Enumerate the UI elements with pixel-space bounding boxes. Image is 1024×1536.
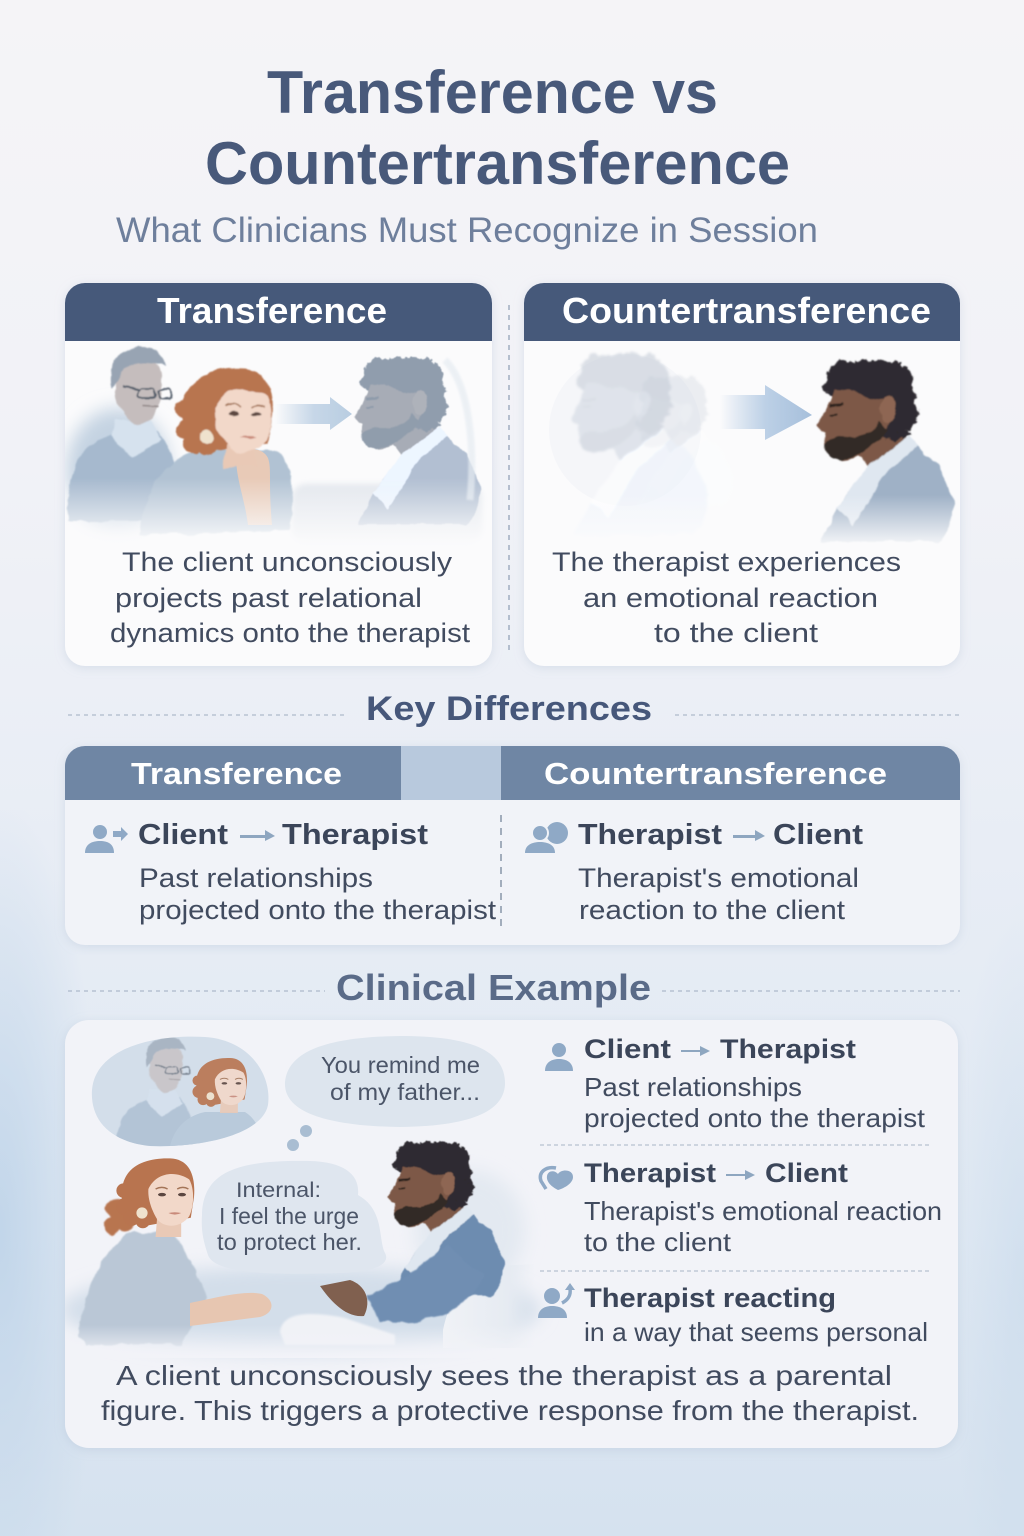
therapist chair arm (280, 1314, 395, 1345)
item: client to therapist: Client (584, 1034, 671, 1064)
transference description: The client unconsciously (122, 547, 453, 577)
table header left (65, 746, 401, 800)
case summary: A client unconsciously sees the therapist as a parental (116, 1360, 892, 1391)
item: client to therapist (584, 1034, 926, 1133)
item: therapist to client: Therapist's emotional reaction (584, 1196, 942, 1226)
title (205, 59, 790, 197)
speech bubble: internal thought: Internal: (236, 1179, 321, 1202)
left column heading: Transference (131, 756, 342, 791)
left column description: projected onto the therapist (139, 895, 497, 925)
direction label: therapist to client (578, 819, 863, 851)
transference description (110, 547, 471, 648)
icon: therapist to client (525, 822, 568, 853)
item: therapist to client: to the client (584, 1227, 732, 1257)
item: therapist reacting: Therapist reacting (584, 1283, 836, 1313)
thought bubble with memory of father (92, 1036, 268, 1146)
speech bubble: you remind me: You remind me (321, 1052, 480, 1078)
right column description: reaction to the client (579, 895, 846, 925)
title: Transference vs (267, 59, 718, 126)
item: client to therapist: Therapist (720, 1034, 856, 1064)
countertransference description: The therapist experiences (552, 547, 901, 577)
right column description: Therapist's emotional (578, 863, 859, 893)
item: client to therapist: Past relationships (584, 1072, 802, 1102)
thought dots (287, 1125, 312, 1151)
direction label: client to therapist (138, 819, 428, 851)
transference description: projects past relational (115, 583, 422, 613)
therapist figure (388, 1142, 504, 1296)
speech bubble: you remind me: of my father... (330, 1079, 480, 1105)
direction label: client to therapist: Therapist (282, 819, 428, 851)
speech bubble: internal thought (202, 1161, 386, 1274)
left column description: Past relationships (139, 863, 373, 893)
transference heading: Transference (157, 290, 387, 331)
countertransference header bar (524, 283, 960, 341)
illustration: therapist with ghosted reflection (570, 351, 956, 543)
case summary (101, 1360, 919, 1426)
arrow: projection (275, 397, 352, 430)
therapist chair back (443, 1289, 521, 1342)
item: therapist reacting: in a way that seems personal (584, 1317, 928, 1347)
item: therapist to client (584, 1158, 942, 1257)
arrow: reaction (720, 385, 812, 440)
item: therapist to client: Therapist (584, 1158, 716, 1188)
heading: key differences: Key Differences (366, 690, 652, 728)
speech bubble: internal thought: to protect her. (217, 1229, 362, 1255)
panel: transference (65, 283, 492, 666)
right column description (578, 863, 859, 925)
item: therapist to client: Client (765, 1158, 848, 1188)
countertransference description: an emotional reaction (583, 583, 878, 613)
item: client to therapist: projected onto the therapist (584, 1103, 926, 1133)
panel: clinical example (60, 1020, 958, 1448)
panel: key differences table (65, 746, 960, 945)
countertransference description: to the client (654, 618, 819, 648)
table header right (501, 746, 960, 800)
direction label: therapist to client: Therapist (578, 819, 722, 851)
speech bubble: you remind me (285, 1036, 505, 1127)
transference description: dynamics onto the therapist (110, 618, 471, 648)
icon: client (545, 1043, 573, 1071)
icon: therapist reacting (538, 1283, 575, 1318)
direction label: therapist to client: Client (773, 819, 863, 851)
left column description (139, 863, 497, 925)
right column heading: Countertransference (544, 756, 887, 791)
case summary: figure. This triggers a protective response from the therapist. (101, 1395, 919, 1426)
subtitle: What Clinicians Must Recognize in Session (116, 211, 818, 250)
direction label: client to therapist: Client (138, 819, 228, 851)
heading: clinical example: Clinical Example (336, 967, 651, 1008)
countertransference description (552, 547, 901, 648)
panel: countertransference (524, 283, 960, 666)
item: therapist reacting (584, 1283, 928, 1347)
countertransference heading: Countertransference (562, 290, 931, 331)
transference header bar (65, 283, 492, 341)
icon: client to therapist (85, 825, 128, 853)
illustration: client projecting father figure onto therapist (65, 345, 482, 536)
speech bubble: internal thought: I feel the urge (219, 1203, 359, 1229)
title: Countertransference (205, 130, 790, 197)
client figure (78, 1158, 272, 1345)
illustration: session scene (60, 1036, 540, 1358)
icon: heart with arrow (540, 1168, 573, 1190)
